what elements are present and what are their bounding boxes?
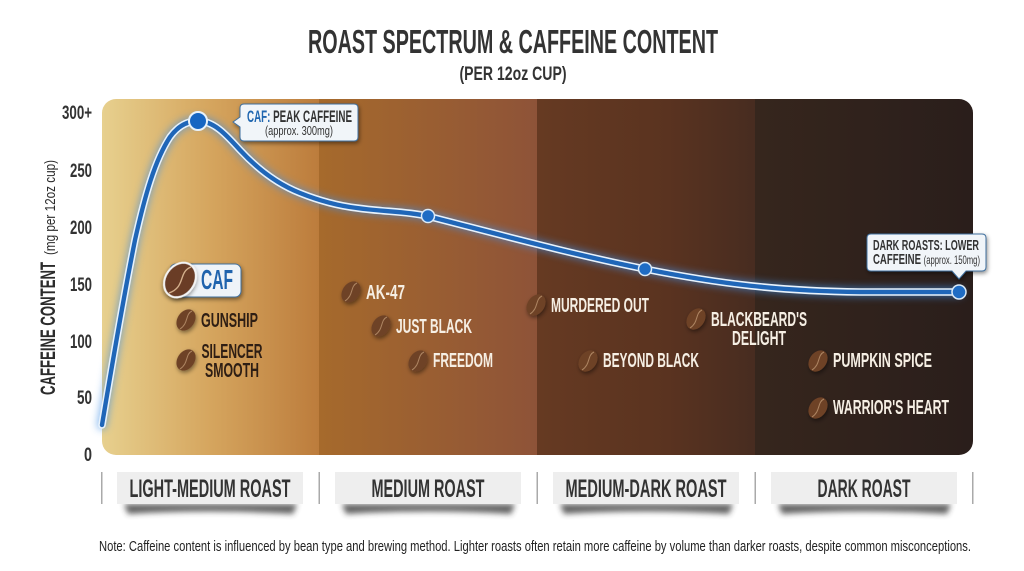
roast label: medium — [335, 472, 521, 514]
brand: AK-47: AK-47 — [366, 282, 405, 304]
data point: dark — [952, 285, 966, 299]
brand: Freedom: FREEDOM — [433, 350, 493, 372]
callout: peak caffeine: (approx. 300mg) — [265, 124, 333, 138]
brand: Freedom — [404, 347, 493, 375]
brand: Blackbeard's Delight: DELIGHT — [732, 328, 786, 350]
data point: medium-dark — [638, 262, 652, 276]
y axis: 0 — [84, 445, 92, 466]
y axis: 50 — [77, 388, 92, 409]
highlighted brand: CAF: CAF — [201, 264, 233, 295]
brand: Silencer Smooth: SILENCER — [202, 341, 263, 363]
roast label: dark — [771, 472, 957, 514]
brand: Gunship — [172, 306, 258, 334]
roast label: medium: MEDIUM ROAST — [372, 475, 484, 503]
y axis: 200 — [70, 218, 92, 239]
callout: dark roasts: CAFFEINE (approx. 150mg) — [873, 251, 980, 268]
y axis: 100 — [70, 332, 92, 353]
brand: Beyond Black — [574, 347, 699, 375]
brand: Gunship: GUNSHIP — [201, 310, 258, 332]
brand: Beyond Black: BEYOND BLACK — [603, 350, 699, 372]
highlighted brand: CAF — [158, 257, 241, 303]
brand: Silencer Smooth — [172, 341, 263, 382]
y axis: 150 — [70, 275, 92, 296]
brand: Blackbeard's Delight: BLACKBEARD'S — [711, 309, 807, 331]
data point: peak — [189, 112, 207, 130]
caffeine curve — [102, 121, 959, 425]
y axis: 300+ — [62, 103, 92, 124]
brand: Blackbeard's Delight — [682, 305, 807, 350]
roast label: medium-dark — [553, 472, 739, 514]
title: ROAST SPECTRUM & CAFFEINE CONTENT — [308, 23, 718, 60]
callout: peak caffeine: CAF: PEAK CAFFEINE — [247, 107, 352, 126]
brand: Silencer Smooth: SMOOTH — [205, 360, 259, 382]
subtitle: (PER 12oz CUP) — [460, 64, 566, 85]
data point: medium — [422, 210, 434, 222]
roast label: light-medium — [117, 472, 303, 514]
brand: Just Black: JUST BLACK — [396, 316, 472, 338]
brand: Pumpkin Spice: PUMPKIN SPICE — [833, 350, 932, 372]
brand: Warrior's Heart: WARRIOR'S HEART — [833, 397, 949, 419]
roast label: medium-dark: MEDIUM-DARK ROAST — [566, 475, 726, 503]
brand: Pumpkin Spice — [804, 347, 932, 375]
brand: AK-47 — [337, 278, 405, 306]
y axis: 250 — [70, 161, 92, 182]
brand: Just Black — [367, 312, 472, 340]
panel: roast spectrum background — [102, 99, 973, 455]
callout: peak caffeine — [233, 104, 358, 141]
y axis title: CAFFEINE CONTENT — [37, 262, 60, 395]
brand: Murdered Out — [522, 291, 649, 319]
brand: Warrior's Heart — [804, 394, 949, 422]
y axis — [37, 103, 92, 466]
y axis unit: (mg per 12oz cup) — [42, 160, 59, 255]
roast label: dark: DARK ROAST — [818, 475, 910, 503]
roast label: light-medium: LIGHT-MEDIUM ROAST — [130, 475, 290, 503]
callout: dark roasts — [867, 234, 986, 279]
brand: Murdered Out: MURDERED OUT — [551, 295, 649, 317]
